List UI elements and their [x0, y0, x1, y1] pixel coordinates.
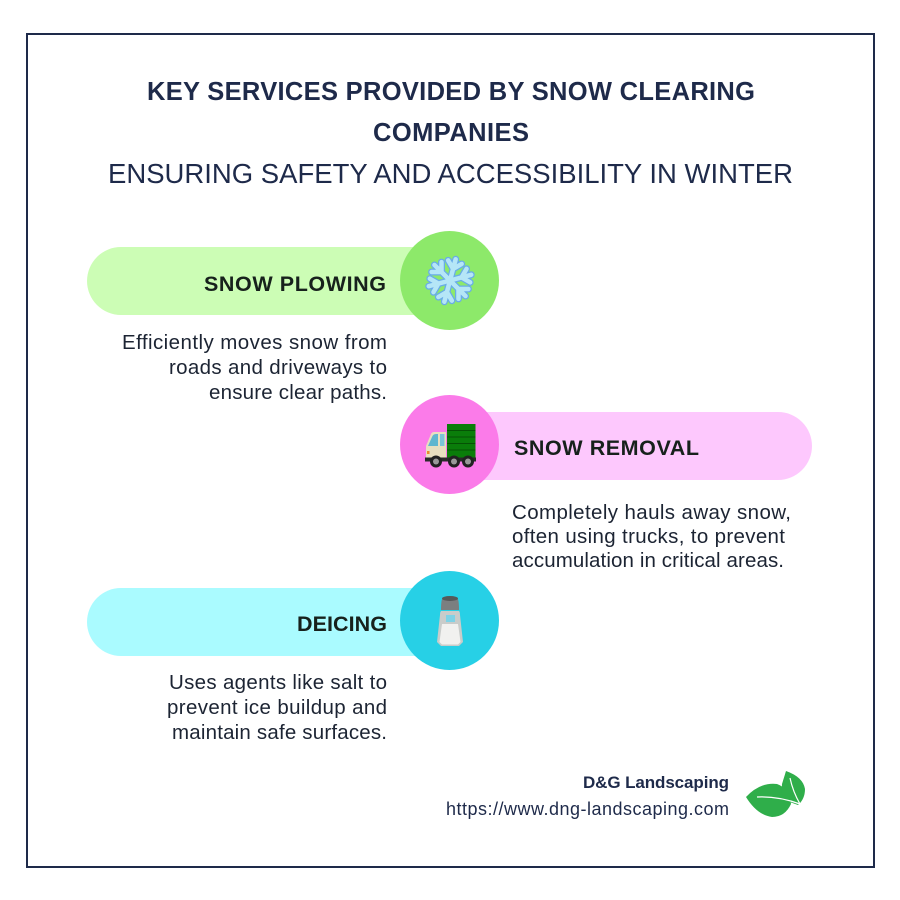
description: snow plowing — [122, 331, 387, 404]
icon: leaves logo — [746, 771, 805, 817]
description: snow removal: accumulation in critical areas. — [512, 549, 784, 572]
description: snow plowing: roads and driveways to — [169, 356, 387, 379]
label pill: snow plowing — [87, 247, 450, 315]
description: deicing — [167, 671, 387, 744]
title — [147, 78, 755, 147]
label pill: snow plowing: SNOW PLOWING — [204, 272, 386, 296]
icon: truck — [400, 395, 499, 494]
description: snow plowing: Efficiently moves snow from — [122, 331, 387, 354]
description: deicing: Uses agents like salt to — [169, 671, 387, 694]
footer: brand: https://www.dng-landscaping.com — [446, 799, 729, 819]
description: snow removal: often using trucks, to prevent — [512, 525, 785, 548]
label pill: snow removal: SNOW REMOVAL — [514, 436, 699, 460]
title: COMPANIES — [373, 119, 529, 147]
footer: brand: D&G Landscaping — [583, 773, 729, 792]
label pill: snow removal — [449, 412, 812, 480]
description: snow removal — [512, 501, 791, 572]
description: deicing: maintain safe surfaces. — [172, 721, 387, 744]
title: KEY SERVICES PROVIDED BY SNOW CLEARING — [147, 78, 755, 106]
panel: snow removal — [400, 395, 812, 572]
footer: brand — [446, 773, 729, 819]
panel: snow plowing — [87, 231, 499, 404]
subtitle: ENSURING SAFETY AND ACCESSIBILITY IN WINTER — [108, 158, 793, 189]
description: snow removal: Completely hauls away snow, — [512, 501, 791, 524]
icon: salt shaker — [400, 571, 499, 670]
description: snow plowing: ensure clear paths. — [209, 381, 387, 404]
panel: deicing — [87, 571, 499, 744]
label pill: deicing: DEICING — [297, 612, 387, 636]
icon: snowflake — [400, 231, 499, 330]
label pill: deicing — [87, 588, 450, 656]
description: deicing: prevent ice buildup and — [167, 696, 387, 719]
